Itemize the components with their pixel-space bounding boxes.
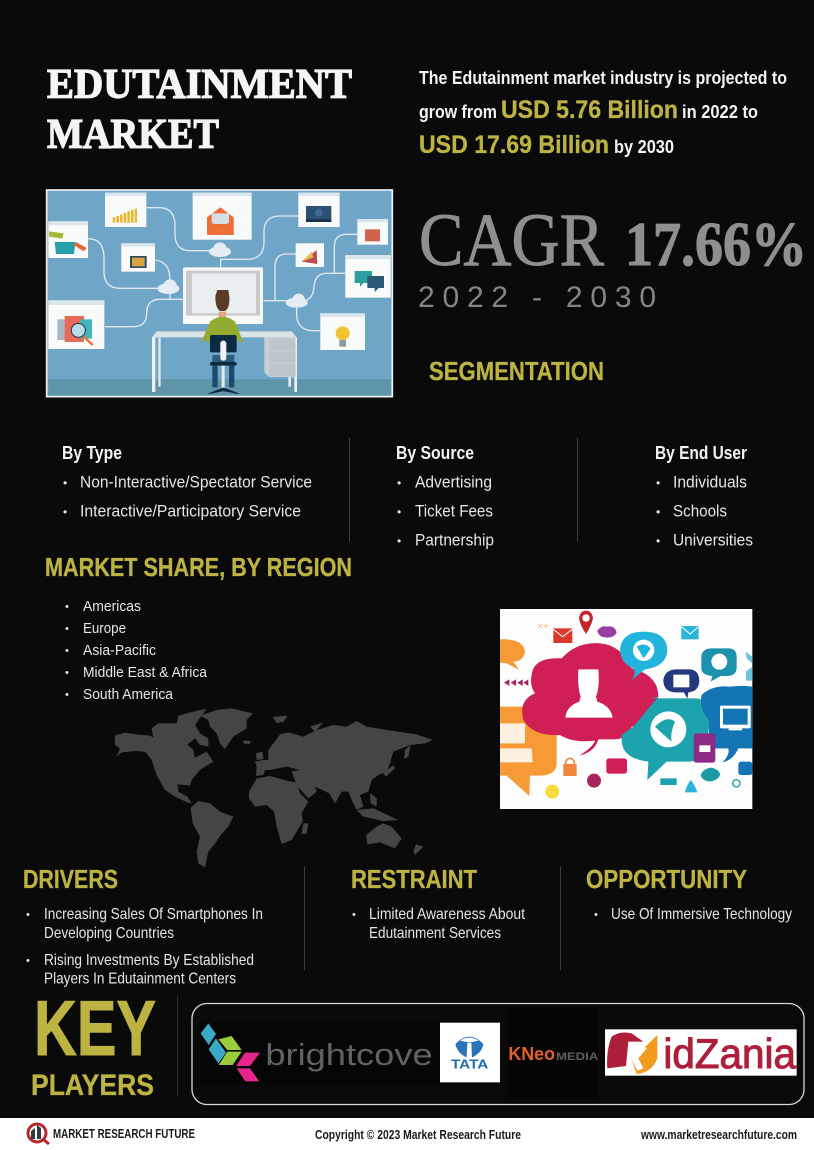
segment: by end user: Schools (673, 502, 727, 520)
segment: by end user: • (656, 534, 660, 548)
connector lines (88, 208, 357, 331)
logo: kneomedia: MEDIA (556, 1051, 598, 1063)
segment: by source: • (397, 505, 401, 519)
market projection text: in 2022 to (682, 102, 758, 122)
segmentation heading: SEGMENTATION (429, 358, 604, 386)
segment: by end user: • (656, 476, 660, 490)
segment: by source: Partnership (415, 532, 494, 550)
desk (152, 331, 297, 337)
small bubbles (620, 632, 667, 682)
key players heading: KEY (34, 984, 156, 1072)
logo: kneomedia: KNeo (508, 1043, 555, 1064)
CAGR figure (418, 199, 807, 314)
CAGR figure: 2022 - 2030 (418, 281, 656, 314)
drivers: • (26, 909, 30, 921)
opportunity: • (594, 909, 598, 921)
segment: by end user: Universities (673, 532, 753, 550)
illustration: social media speech bubbles (500, 609, 752, 809)
title: EDUTAINMENT (47, 62, 352, 108)
drivers: • (26, 955, 30, 967)
market projection text: USD 17.69 Billion (419, 131, 609, 159)
segment: by source: • (397, 534, 401, 548)
restraint (351, 864, 525, 942)
region list: • (65, 601, 69, 613)
restraint: • (352, 909, 356, 921)
segment: by type: • (63, 505, 67, 519)
market projection text: USD 5.76 Billion (501, 96, 678, 124)
market projection text: by 2030 (614, 137, 674, 157)
footer (0, 1118, 814, 1150)
logo: tata (440, 1023, 500, 1082)
region list: Middle East & Africa (83, 664, 208, 681)
drivers: Increasing Sales Of Smartphones In (44, 906, 263, 923)
region list: • (65, 645, 69, 657)
segment: by type: Non-Interactive/Spectator Service (80, 474, 312, 492)
region list: Europe (83, 620, 126, 637)
region list: • (65, 689, 69, 701)
window icons (49, 206, 384, 347)
small icons (553, 628, 572, 643)
drivers: Developing Countries (44, 925, 174, 942)
person (201, 317, 243, 352)
title (47, 62, 352, 158)
crimson user cloud (522, 643, 658, 756)
segment: by end user (655, 442, 753, 550)
opportunity (586, 864, 792, 923)
logo: kidzania: idZania (663, 1031, 796, 1077)
market projection text (419, 68, 787, 159)
region list (65, 598, 208, 703)
segment: by type (62, 442, 312, 520)
logo: brightcove (201, 1023, 433, 1081)
restraint: Limited Awareness About (369, 906, 525, 923)
segment: by end user: Individuals (673, 474, 747, 492)
segment: by type: • (63, 476, 67, 490)
key players heading: PLAYERS (31, 1069, 154, 1102)
footer: MARKET RESEARCH FUTURE (53, 1127, 195, 1141)
segment: by source: • (397, 476, 401, 490)
region list: Asia-Pacific (83, 642, 156, 659)
drivers: Players In Edutainment Centers (44, 970, 236, 988)
window title bars (48, 193, 391, 317)
logo: kidzania (605, 1029, 797, 1077)
key players heading (31, 984, 156, 1102)
region list: Americas (83, 598, 141, 615)
footer logo icon (28, 1124, 49, 1144)
teal bubble (622, 697, 708, 780)
segment: by source: Ticket Fees (415, 502, 493, 520)
clouds (157, 242, 308, 308)
footer: Copyright © 2023 Market Research Future (315, 1128, 521, 1142)
drivers: DRIVERS (23, 864, 118, 894)
illustration: person at desk with connected network (47, 190, 392, 397)
orange laptop bubble (500, 707, 557, 796)
segment: by end user: By End User (655, 442, 747, 463)
market projection text: grow from (419, 102, 497, 122)
drivers: Rising Investments By Established (44, 952, 254, 969)
drivers (23, 864, 263, 988)
segment: by type: By Type (62, 442, 122, 463)
key players logo panel (192, 1004, 804, 1104)
floating windows (48, 193, 391, 350)
CAGR figure: CAGR (419, 199, 604, 282)
logo: brightcove: brightcove (265, 1038, 433, 1072)
segment: by source: By Source (396, 442, 474, 463)
blue bubble (701, 686, 752, 762)
region list: South America (83, 686, 174, 703)
opportunity: OPPORTUNITY (586, 864, 747, 894)
region list: • (65, 623, 69, 635)
illustration: social media speech bubbles: ×+ (537, 621, 549, 632)
restraint: Edutainment Services (369, 925, 501, 942)
world map (115, 708, 433, 867)
region list: • (65, 667, 69, 679)
segment: by end user: • (656, 505, 660, 519)
logo: tata: TATA (451, 1058, 488, 1072)
monitor (183, 267, 263, 324)
segment: by source (396, 442, 494, 550)
restraint: RESTRAINT (351, 864, 477, 894)
segment: by type: Interactive/Participatory Service (80, 502, 301, 520)
title: MARKET (47, 112, 219, 158)
segment: by source: Advertising (415, 474, 492, 492)
market share heading: MARKET SHARE, BY REGION (45, 554, 352, 582)
logo: kneomedia (508, 1043, 598, 1064)
